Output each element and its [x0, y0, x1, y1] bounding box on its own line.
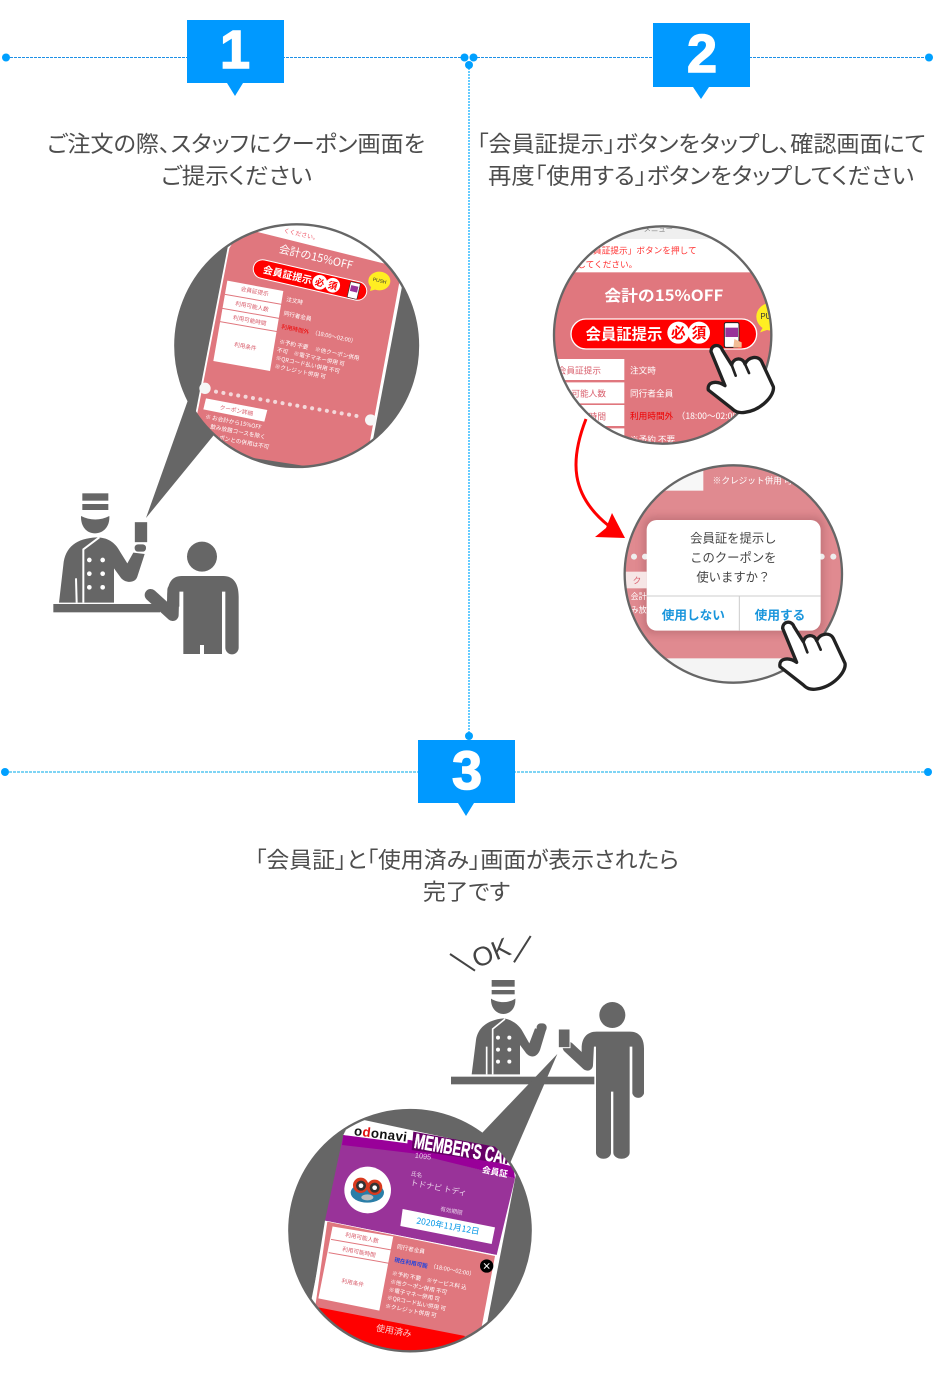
used stamp bar [318, 1307, 465, 1350]
step 2 instruction text [477, 127, 926, 191]
magnified coupon screen: step 1: 利用可能人数 [235, 298, 270, 314]
magnified member card: step 3: ※予約 不要 ※サービス料 込 [391, 1268, 468, 1292]
step 3 instruction text: 「会員証」と「使用済み」画面が表示されたら [255, 843, 679, 875]
magnified coupon screen: step 1: （18:00〜02:00） [311, 327, 357, 345]
magnified coupon screen: step 1: くください。 [283, 226, 320, 242]
button: member card [571, 319, 757, 349]
coupon button: 会員証提示 [262, 261, 314, 287]
magnified coupon screen: step 2 top: メニュー [644, 224, 673, 235]
magnified member card: step 3: MEMBER'S CARD [412, 1130, 523, 1171]
magnified coupon screen: step 1: ※ お会計から15%OFF [205, 411, 262, 431]
magnified coupon screen: step 2 top: 「会員証提示」ボタンを押して [576, 244, 697, 256]
step badge 3 [418, 740, 515, 816]
magnified member card: step 3: 利用可能人数 [345, 1230, 380, 1245]
magnified coupon screen: step 1: 注文時 [286, 294, 304, 307]
magnified coupon screen: step 2 top: 利用時間外 [630, 410, 674, 422]
step 2 instruction text: 「会員証提示」ボタンをタップし、確認画面にて [477, 127, 926, 159]
push bubble [368, 272, 390, 291]
magnified dialog screen: step 2 bottom: 会計 [631, 591, 647, 602]
confirmation dialog [647, 520, 821, 631]
magnified member card: step 3: ※他クーポン併用 不可 [390, 1276, 448, 1296]
confirmation dialog: このクーポンを [690, 548, 776, 566]
magnified coupon screen: step 2 top [552, 225, 772, 445]
coupon button [251, 258, 369, 302]
magnified dialog screen: step 2 bottom [624, 464, 844, 684]
confirmation dialog: 使用しない [662, 604, 725, 623]
magnified coupon screen: step 1: クーポン詳細 [219, 402, 254, 418]
confirmation dialog: 使いますか？ [696, 567, 770, 585]
magnified coupon screen: step 1: 不可 ※電子マネー併用 可 [276, 345, 346, 368]
OK callout: OK [468, 932, 515, 974]
step badge 1 [187, 20, 284, 96]
magnified coupon screen: step 1: ※QRコード払い併用 不可 [275, 353, 341, 375]
confirmation dialog: 使用する [755, 604, 805, 623]
magnified dialog screen: step 2 bottom: み放 [631, 604, 647, 615]
divider lines and nodes [1, 54, 933, 776]
purple header [325, 1135, 515, 1255]
illustration: OK exchange between staff and customer [450, 932, 644, 1163]
expiry date [400, 1209, 495, 1244]
magnified member card: step 3: 同行者全員 [396, 1241, 426, 1256]
used stamp bar: 使用済み [375, 1321, 413, 1340]
magnified coupon screen: step 1: ※クレジット併用 可 [274, 361, 327, 381]
magnified member card: step 3: トドナビ トディ [409, 1177, 468, 1199]
magnified member card: step 3: （18:00〜02:00） [430, 1261, 476, 1278]
button: member card: 須 [692, 322, 707, 343]
magnified member card: step 3: ※クレジット併用 可 [385, 1301, 438, 1320]
magnified dialog screen: step 2 bottom: ク [633, 574, 641, 586]
magnified coupon screen: step 2 top: 確認してください。 [560, 259, 637, 271]
push bubble clipped [756, 304, 770, 332]
push bubble: PUSH [372, 277, 387, 286]
pointing hand: dialog [780, 622, 845, 689]
button: member card: 会員証提示 [586, 323, 662, 345]
step badge 2: 2 [687, 24, 717, 84]
magnified member card: step 3: 氏名 [410, 1168, 423, 1180]
coupon button: 須 [327, 277, 340, 293]
magnified coupon screen: step 2 top: 注文時 [630, 364, 656, 376]
magnified member card: step 3: 有効期限 [440, 1204, 464, 1217]
illustration: staff showing card to customer [53, 493, 239, 654]
magnified coupon screen: step 2 top: 利用可能時間 [554, 410, 606, 422]
magnified member card: step 3: 1095 [414, 1151, 432, 1162]
magnified member card: step 3: 会員証 [481, 1163, 509, 1180]
magnified member card: step 3: 現在利用可能 [394, 1255, 429, 1270]
magnified member card: step 3: ※QRコード払い併用 可 [386, 1292, 447, 1313]
avatar [344, 1167, 391, 1213]
OK callout [450, 932, 531, 974]
magnified coupon screen: step 1 [175, 222, 418, 475]
button: member card: 必 [671, 322, 686, 343]
step 1 instruction text [47, 127, 425, 191]
magnified member card: step 3 [289, 1110, 531, 1360]
magnified coupon screen: step 1: 飲み放題コースを除く [210, 421, 267, 441]
step 2 instruction text: 再度「使用する」ボタンをタップしてください [488, 159, 914, 191]
magnified coupon screen: step 1: ※予約 不要 ※他クーポン併用 [279, 336, 361, 362]
pointing hand: step 2 [708, 346, 773, 413]
step 1 instruction text: ご注文の際、スタッフにクーポン画面を [47, 127, 425, 159]
magnified coupon screen: step 1: 利用条件 [234, 339, 258, 353]
magnified coupon screen: step 2 top: 会計の15%OFF [604, 284, 723, 306]
magnified coupon screen: step 2 top: 同行者全員 [630, 387, 674, 399]
step badge 3: 3 [452, 741, 482, 801]
expiry date: 2020年11月12日 [415, 1214, 481, 1237]
magnified coupon screen: step 1: 同行者全員 [283, 308, 313, 323]
step 3 instruction text: 完了です [423, 875, 510, 907]
magnified coupon screen: step 2 top: 会員証提示 [558, 365, 601, 377]
magnified coupon screen: step 2 top: ※予約 不要 [630, 433, 676, 445]
magnified coupon screen: step 2 top: 利用可能人数 [554, 388, 606, 400]
step badge 1: 1 [220, 20, 250, 80]
red arrow between screens [576, 419, 625, 538]
magnified coupon screen: step 1: ーポンとの併用は不可 [213, 431, 270, 451]
step 1 instruction text: ご提示ください [161, 159, 312, 191]
logo [343, 1127, 408, 1144]
magnified member card: step 3: 利用可能時間 [342, 1244, 377, 1259]
close button [480, 1259, 493, 1273]
step 3 instruction text [255, 843, 679, 907]
magnified coupon screen: step 1: 会計の15%OFF [277, 241, 355, 273]
coupon button: 必 [314, 274, 327, 290]
magnified member card: step 3: 利用条件 [341, 1276, 365, 1289]
magnified coupon screen: step 2 top: （18:00〜02:00） [677, 410, 746, 422]
logo: odonavi [353, 1123, 408, 1145]
magnified coupon screen: step 1: 利用時間外 [281, 321, 310, 336]
step badge 2 [653, 23, 750, 99]
magnified member card: step 3: ※電子マネー併用 可 [388, 1284, 441, 1303]
confirmation dialog: 会員証を提示し [690, 529, 776, 547]
push bubble clipped: PU [760, 312, 772, 321]
magnified coupon screen: step 1: 利用可能時間 [232, 312, 268, 328]
magnified coupon screen: step 1: 会員証提示 [240, 284, 270, 298]
magnified dialog screen: step 2 bottom: ※クレジット併用 可 [713, 474, 793, 486]
speech tail: step 1 [146, 400, 218, 518]
